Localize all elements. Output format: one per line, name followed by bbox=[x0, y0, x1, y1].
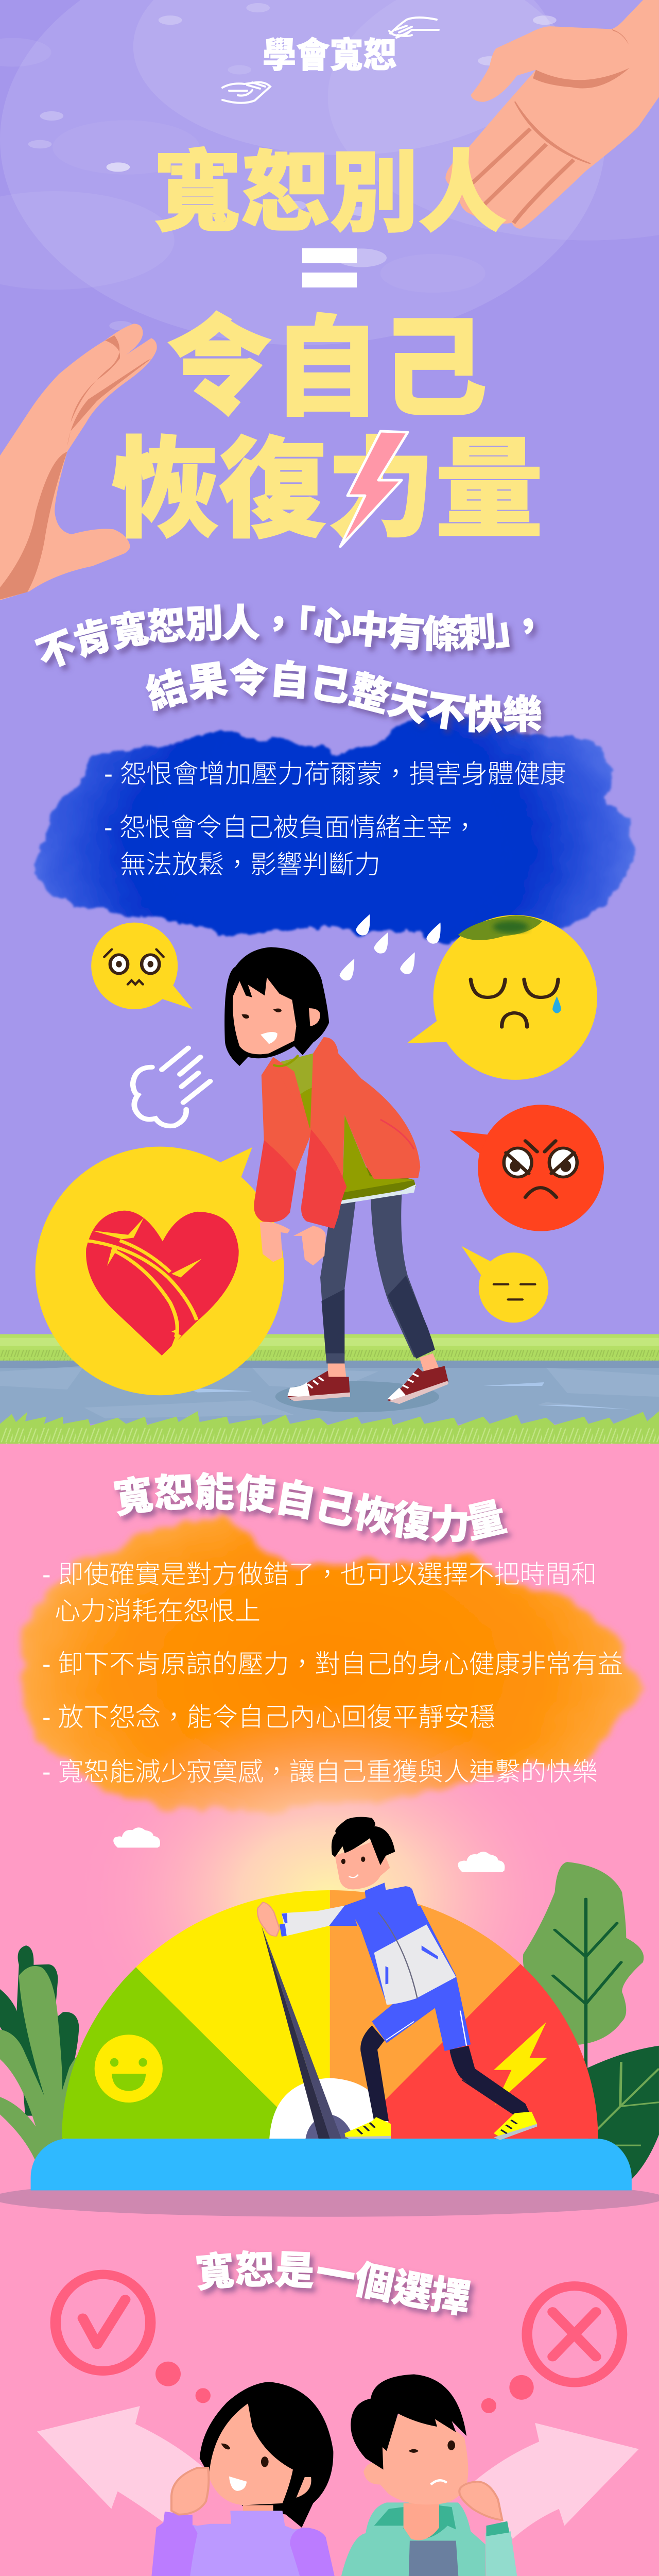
icon: plants right bbox=[523, 1862, 659, 2180]
icon: lightning bolt bbox=[340, 431, 408, 547]
icon: clouds bbox=[113, 1827, 505, 1872]
icon: reaching hand bottom left bbox=[0, 324, 157, 600]
figure: man pushing needle bbox=[257, 1817, 537, 2140]
thought dots bbox=[155, 2362, 534, 2413]
icon: expressionless bubble bbox=[461, 1246, 548, 1323]
figure: man in teal hoodie bbox=[326, 2374, 526, 2576]
orange ink cloud bbox=[21, 1517, 643, 1808]
icon: tick circle bbox=[56, 2275, 150, 2371]
icon: arrow left bbox=[37, 2406, 206, 2526]
icon: arrow right bbox=[475, 2423, 639, 2539]
panel: pink background bbox=[0, 1444, 659, 2576]
text block: resentment effects: - 怨恨會增加壓力荷爾蒙，損害身體健康 bbox=[104, 759, 566, 788]
text block: benefits of forgiveness: 心力消耗在怨恨上 bbox=[55, 1597, 261, 1625]
icon: worried bubble bbox=[91, 923, 193, 1009]
text block: resentment effects bbox=[104, 759, 566, 879]
text block: benefits of forgiveness: - 寬恕能減少寂寞感，讓自己重獲與人連繫的快樂 bbox=[42, 1757, 598, 1786]
text block: benefits of forgiveness: - 卸下不肯原諒的壓力，對自己的身心健康非常有益 bbox=[42, 1650, 623, 1679]
gauge hub bbox=[269, 2078, 391, 2139]
figure: woman in purple sweater bbox=[146, 2382, 346, 2576]
scene: a choice bbox=[37, 2275, 639, 2576]
shoes bbox=[287, 1366, 448, 1404]
heading: 寬恕能使自己恢復力量: 寬恕能使自己恢復力量 bbox=[113, 1471, 514, 1549]
title: 寬恕別人: 寬恕別人 bbox=[153, 144, 507, 243]
icon: plants left bbox=[0, 1945, 84, 2162]
figure: tired girl bbox=[224, 947, 448, 1404]
title: 學會寬恕: 學會寬恕 bbox=[263, 36, 397, 75]
icon: lightning bbox=[494, 2022, 547, 2105]
legs bbox=[320, 1194, 440, 1378]
gauge backlight glow bbox=[72, 1700, 587, 2092]
heading: 寬恕是一個選擇: 寬恕是一個選擇 bbox=[196, 2250, 477, 2323]
heading: 不肯寬恕別人: 不肯寬恕別人，「心中有條刺」， bbox=[34, 604, 540, 673]
scene: recovery gauge bbox=[0, 1803, 659, 2217]
hands bbox=[259, 1222, 326, 1265]
chart: dome gauge segments bbox=[62, 1890, 598, 2139]
blue gauge base bbox=[31, 2139, 632, 2191]
heading: 結果令自己整天不快樂: 結果令自己整天不快樂 bbox=[145, 657, 547, 739]
text block: benefits of forgiveness: - 放下怨念，能令自己內心回復平靜安穩 bbox=[42, 1703, 495, 1732]
text block: resentment effects: 無法放鬆，影響判斷力 bbox=[120, 850, 380, 879]
icon: angry bubble bbox=[449, 1105, 604, 1231]
scene: ground with grass and road bbox=[0, 1334, 659, 1444]
icon: equals sign bbox=[302, 248, 357, 287]
icon: heart with thorn bubble bbox=[36, 1147, 284, 1395]
icon: reaching hand top right bbox=[445, 0, 659, 229]
icon: cross circle bbox=[527, 2286, 622, 2382]
shadow under gauge bbox=[0, 2179, 659, 2217]
icon: small hands around title bbox=[222, 18, 439, 103]
icon: smiley bbox=[95, 2035, 163, 2103]
title: 恢復力量: 恢復力量 bbox=[111, 429, 543, 551]
emotion speech bubbles bbox=[36, 915, 604, 1395]
title: 令自己: 令自己 bbox=[166, 307, 488, 429]
head and hair bbox=[224, 947, 329, 1066]
blue ink cloud bbox=[33, 708, 635, 945]
text block: resentment effects: - 怨恨會令自己被負面情緒主宰， bbox=[104, 813, 478, 842]
header decorative bubbles bbox=[0, 0, 659, 345]
text block: benefits of forgiveness bbox=[42, 1560, 623, 1786]
icon: sigh puff bbox=[133, 1048, 210, 1126]
gauge needle bbox=[262, 1926, 341, 2139]
panel: purple background bbox=[0, 0, 659, 1444]
icon: raindrops bbox=[340, 914, 441, 980]
clothing bbox=[254, 1037, 420, 1229]
icon: sad bubble bbox=[407, 915, 597, 1080]
text block: benefits of forgiveness: - 即使確實是對方做錯了，也可以選擇不把時間和 bbox=[42, 1560, 597, 1589]
